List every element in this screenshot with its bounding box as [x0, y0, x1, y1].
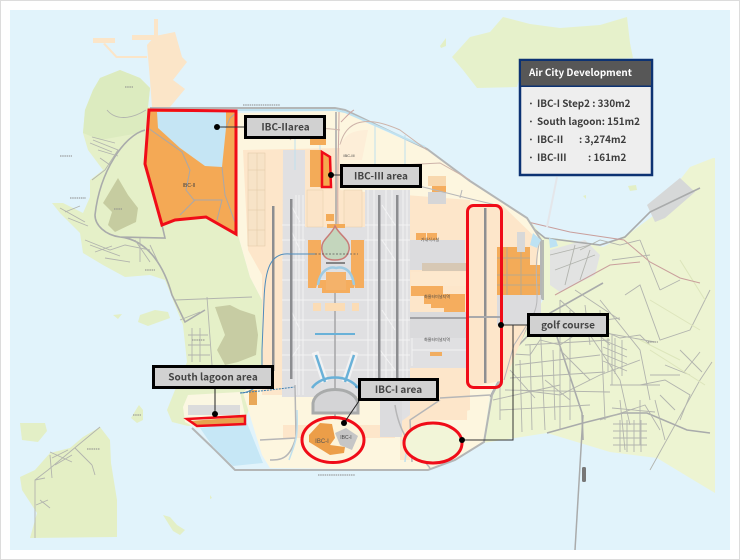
IBC-II orange area: [145, 110, 236, 234]
callout: golf course: golf course: [541, 316, 595, 332]
callout: South lagoon area: South lagoon area: [168, 368, 258, 384]
north orange buildings: [310, 123, 345, 228]
panel list: : 161m2: [588, 150, 626, 164]
south lagoon water: [200, 423, 263, 466]
left and right runways: [272, 195, 398, 380]
cargo area: [410, 233, 467, 356]
callout: IBC-III area: [328, 166, 420, 186]
airport perimeter road: [150, 108, 541, 470]
callout: IBC-I area: IBC-I area: [375, 381, 422, 396]
callout: golf course: [459, 314, 608, 443]
panel list: ·: [528, 96, 534, 110]
mainland district block: [550, 240, 600, 292]
concourse block: [313, 303, 359, 311]
airfield grey zone: [282, 150, 467, 437]
callout: IBC-II area: IBC-IIarea: [261, 118, 310, 134]
north seawall channel: [237, 110, 425, 147]
southwest island: [20, 427, 117, 538]
south lagoon land: [183, 392, 246, 428]
terminal two fingers: [312, 352, 358, 388]
east mainland: [483, 158, 715, 493]
panel body: [520, 60, 652, 175]
south lake channels: [289, 410, 407, 462]
orange plots: [416, 233, 426, 242]
terminal one: [308, 226, 364, 293]
small islands: [20, 38, 637, 535]
golf red ellipse: [404, 423, 462, 463]
west island land mass: [52, 70, 262, 426]
airport rail line: [240, 254, 315, 393]
cargo area: 화물터미널지역: [424, 336, 450, 342]
Incheon bridge: [575, 415, 583, 550]
north east fuel facility: [428, 176, 446, 204]
mountain: [103, 178, 138, 232]
IBC-II roads: [148, 113, 236, 225]
terminal two apron: [313, 390, 358, 413]
panel list: South lagoon: 151m2: [537, 114, 640, 128]
concourse bar: [315, 333, 355, 335]
mainland north industrial complex: [647, 178, 695, 222]
panel list: IBC-II: [537, 132, 563, 146]
South lagoon red outline: [187, 416, 245, 426]
rail line south: [240, 387, 395, 393]
header rule: [520, 86, 652, 87]
panel: Air City Development: [520, 60, 652, 175]
west support buildings: [248, 153, 265, 246]
golf course red outline: [468, 206, 502, 388]
golf plot: [404, 423, 462, 463]
north island: [452, 17, 633, 88]
north reclaimed land: [147, 32, 187, 107]
east road: [395, 180, 540, 380]
IBC-III plot label: IBC-III: [343, 153, 355, 158]
panel header: [521, 61, 651, 86]
IBC-I plot: IBC-I: [340, 435, 352, 441]
callout: IBC-I area: [341, 380, 438, 426]
central spine: [335, 112, 336, 425]
IBC-I red ellipse: [302, 418, 364, 462]
north bridge: [547, 177, 557, 227]
cargo orange steps: [411, 286, 465, 312]
panel list: [528, 96, 640, 164]
airfield taxiway marks: [282, 190, 466, 395]
southern mountain: [215, 305, 258, 365]
panel list: ·: [528, 150, 534, 164]
mainland road red highway: [528, 222, 700, 295]
terminal-front buildings: [307, 190, 362, 227]
mainland urban grid: [490, 188, 712, 470]
callout: IBC-III area: IBC-III area: [354, 168, 408, 182]
illegible map label marks: [60, 87, 658, 475]
panel list: : 3,274m2: [579, 132, 626, 146]
golf-side IBC orange block: [497, 232, 541, 325]
peach plot near lagoon: [249, 390, 257, 405]
IBC-II red outline: [145, 110, 236, 234]
panel list: IBC-I Step2 : 330m2: [537, 96, 631, 110]
teardrop: [322, 226, 349, 260]
south lagoon grey block: [188, 405, 240, 415]
lake channels: [295, 125, 405, 170]
cargo labels: 화물터미널지역: [424, 293, 450, 299]
IBC-III orange plot and outline: [322, 152, 331, 187]
upper forest shade: [83, 70, 150, 140]
south roads: [260, 385, 490, 468]
panel list: IBC-III: [537, 150, 567, 164]
north jetties: [93, 19, 158, 58]
south east grey block: [380, 400, 402, 437]
golf course strip: [467, 208, 502, 383]
north interchange road: [290, 121, 470, 180]
panel list: ·: [528, 132, 534, 146]
callout: South lagoon area: [154, 366, 272, 417]
north lake by interchange: [530, 233, 558, 248]
west island roads: [60, 110, 252, 365]
airport island base: [236, 111, 540, 470]
cargo area: 기내식시설: [421, 236, 440, 242]
IBC-II lake: [157, 112, 226, 167]
southwest island roads: [35, 427, 100, 538]
lagoon orange strip: [190, 417, 244, 426]
panel list: ·: [528, 114, 534, 128]
panel title: Air City Development: [528, 65, 632, 79]
IBC-III white plot: [340, 130, 368, 160]
IBC-I plot: IBC-I: [315, 439, 329, 445]
airport peach land: [243, 148, 538, 460]
IBC-II label: IBC-II: [183, 183, 195, 189]
terminal orange wings: [308, 240, 364, 288]
IBC-I plot: [304, 419, 362, 461]
terminal curved pier: [318, 268, 354, 285]
cargo hall: [410, 240, 465, 270]
IBC-II development: [145, 110, 236, 234]
callout: IBC-II area: [214, 116, 324, 138]
ferry: [582, 467, 586, 482]
